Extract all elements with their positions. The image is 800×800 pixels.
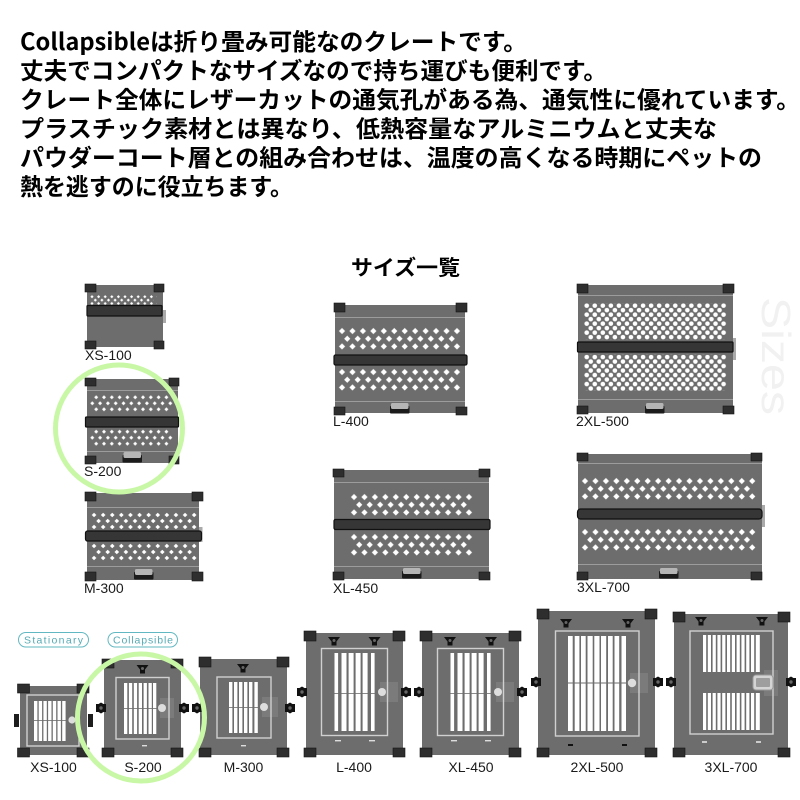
label: XL-450: XL-450 bbox=[333, 580, 378, 596]
label: 3XL-700: 3XL-700 bbox=[577, 579, 630, 595]
pill: Stationary: Stationary bbox=[24, 634, 84, 646]
side view crate: M-300 bbox=[84, 492, 203, 596]
pill: Collapsible: Collapsible bbox=[113, 634, 173, 646]
side view crate: 3XL-700 bbox=[577, 453, 765, 595]
side view crate: XS-100 bbox=[85, 284, 166, 363]
label: S-200: S-200 bbox=[84, 463, 122, 479]
front view crate: M-300 bbox=[192, 657, 295, 775]
label: L-400: L-400 bbox=[336, 759, 372, 775]
label: M-300: M-300 bbox=[84, 580, 124, 596]
label: XS-100: XS-100 bbox=[85, 347, 132, 363]
label: XS-100: XS-100 bbox=[30, 759, 77, 775]
description text block: プラスチック素材とは異なり、低熱容量なアルミニウムと丈夫な bbox=[20, 110, 717, 144]
front view crate: L-400 bbox=[297, 631, 411, 775]
watermark: Sizes: Sizes bbox=[753, 297, 799, 415]
heading: size list: サイズ一覧 bbox=[351, 252, 460, 282]
side view crate: 2XL-500 bbox=[576, 284, 736, 429]
description text block: 丈夫でコンパクトなサイズなので持ち運びも便利です。 bbox=[20, 52, 607, 86]
description text block bbox=[20, 23, 800, 202]
description text block: 熱を逃すのに役立ちます。 bbox=[20, 168, 293, 202]
label: L-400: L-400 bbox=[333, 413, 369, 429]
label: XL-450: XL-450 bbox=[448, 759, 494, 775]
side view crate: L-400 bbox=[333, 303, 467, 429]
front view crate: XL-450 bbox=[414, 631, 527, 775]
label: 2XL-500: 2XL-500 bbox=[576, 413, 629, 429]
label: S-200: S-200 bbox=[124, 759, 162, 775]
front view crate: 3XL-700 bbox=[666, 612, 796, 775]
label: M-300: M-300 bbox=[224, 759, 264, 775]
description text block: パウダーコート層との組み合わせは、温度の高くなる時期にペットの bbox=[20, 139, 762, 173]
label: 2XL-500: 2XL-500 bbox=[571, 759, 624, 775]
front view crate: XS-100 bbox=[14, 684, 93, 775]
front view crate: S-200 bbox=[96, 659, 189, 775]
description text block: クレート全体にレザーカットの通気孔がある為、通気性に優れています。 bbox=[20, 81, 800, 115]
front view crate: 2XL-500 bbox=[531, 609, 663, 775]
label: 3XL-700: 3XL-700 bbox=[705, 759, 758, 775]
side view crate: XL-450 bbox=[333, 469, 490, 596]
highlight circle: side view S-200 bbox=[56, 365, 182, 492]
description text block: Collapsibleは折り畳み可能なのクレートです。 bbox=[20, 23, 527, 57]
highlight circle: front view S-200 bbox=[78, 654, 204, 781]
side view crate: S-200 bbox=[84, 378, 179, 479]
pill: Stationary bbox=[18, 632, 88, 647]
